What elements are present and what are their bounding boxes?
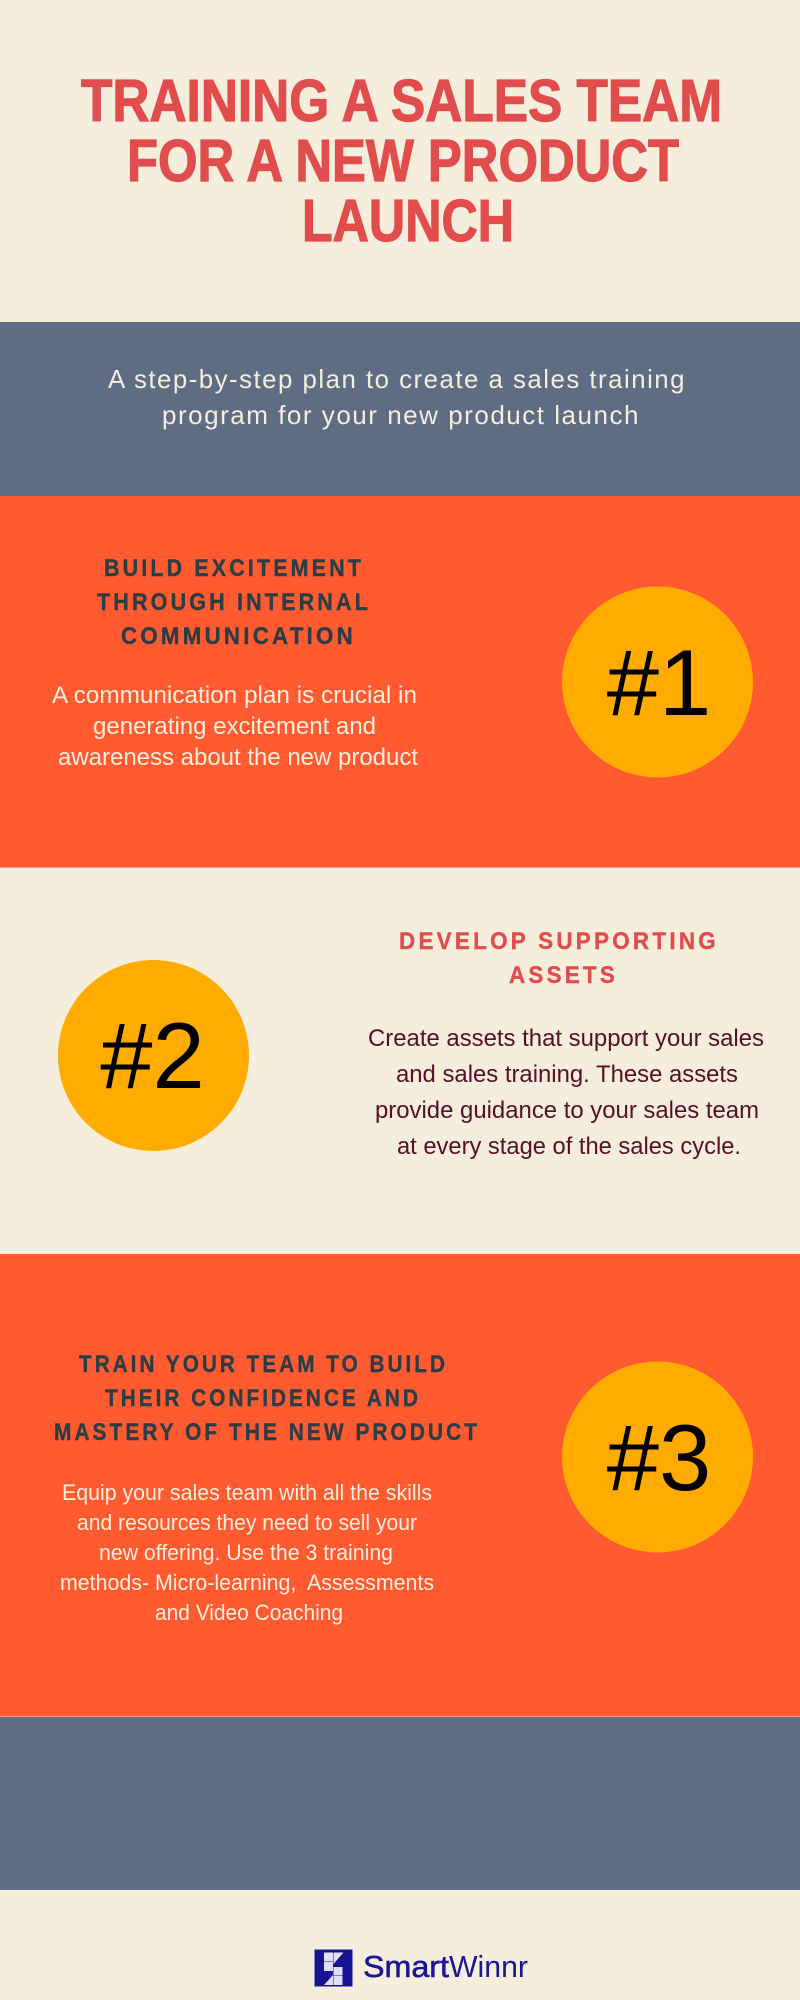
panel: subtitle band bbox=[0, 322, 800, 496]
title: TRAINING A SALES TEAM bbox=[81, 68, 722, 134]
icon: logo mark bbox=[314, 1950, 352, 1986]
title: FOR A NEW PRODUCT bbox=[127, 128, 679, 194]
step 2 heading: DEVELOP SUPPORTING bbox=[399, 928, 719, 955]
step 1 description: generating excitement and bbox=[93, 713, 376, 740]
step 3 description bbox=[60, 1480, 434, 1625]
step 2 heading: ASSETS bbox=[509, 962, 618, 989]
step 3 number badge bbox=[562, 1362, 753, 1552]
title: LAUNCH bbox=[302, 188, 514, 254]
step 1 heading: BUILD EXCITEMENT bbox=[104, 555, 364, 582]
step 2 number badge bbox=[58, 960, 249, 1151]
step 3 heading: THEIR CONFIDENCE AND bbox=[105, 1385, 421, 1412]
step 3 number badge: #3 bbox=[607, 1405, 711, 1510]
panel: step 3 bbox=[0, 1254, 800, 1717]
step 2 description: at every stage of the sales cycle. bbox=[397, 1133, 741, 1160]
SmartWinnr logo bbox=[314, 1949, 528, 1986]
step 3 heading bbox=[54, 1351, 480, 1446]
subtitle text: program for your new product launch bbox=[162, 400, 640, 430]
step 2 number badge: #2 bbox=[100, 1003, 205, 1108]
logo wordmark: Smart bbox=[363, 1949, 449, 1984]
step 1 number badge: #1 bbox=[607, 630, 711, 735]
step 1 description: awareness about the new product bbox=[58, 744, 418, 771]
step 1 heading bbox=[97, 555, 371, 650]
step 2 description: and sales training. These assets bbox=[396, 1061, 738, 1088]
step 3 heading: MASTERY OF THE NEW PRODUCT bbox=[54, 1419, 480, 1446]
subtitle text: A step-by-step plan to create a sales training bbox=[108, 364, 686, 394]
step 3 heading: TRAIN YOUR TEAM TO BUILD bbox=[79, 1351, 448, 1378]
subtitle text bbox=[108, 364, 686, 430]
step 2 description: provide guidance to your sales team bbox=[375, 1097, 759, 1124]
step 2 description bbox=[368, 1025, 764, 1160]
step 1 heading: COMMUNICATION bbox=[121, 623, 356, 650]
step 3 description: Equip your sales team with all the skills bbox=[62, 1480, 432, 1505]
panel: title header bbox=[0, 0, 800, 322]
step 1 description: A communication plan is crucial in bbox=[52, 682, 417, 709]
step 1 heading: THROUGH INTERNAL bbox=[97, 589, 371, 616]
step 3 description: and Video Coaching bbox=[155, 1600, 343, 1625]
panel: step 1 bbox=[0, 496, 800, 868]
step 3 description: and resources they need to sell your bbox=[77, 1510, 417, 1535]
step 2 description: Create assets that support your sales bbox=[368, 1025, 764, 1052]
logo wordmark: Winnr bbox=[449, 1949, 528, 1984]
panel: step 2 bbox=[0, 868, 800, 1254]
step 1 number badge bbox=[562, 586, 753, 778]
title bbox=[81, 68, 722, 254]
step 2 heading bbox=[399, 928, 719, 989]
panel: footer bbox=[0, 1890, 800, 2000]
step 3 description: methods- Micro-learning, Assessments bbox=[60, 1570, 434, 1595]
step 1 description bbox=[52, 682, 418, 771]
step 3 description: new offering. Use the 3 training bbox=[99, 1540, 393, 1565]
panel: empty slate band bbox=[0, 1717, 800, 1890]
